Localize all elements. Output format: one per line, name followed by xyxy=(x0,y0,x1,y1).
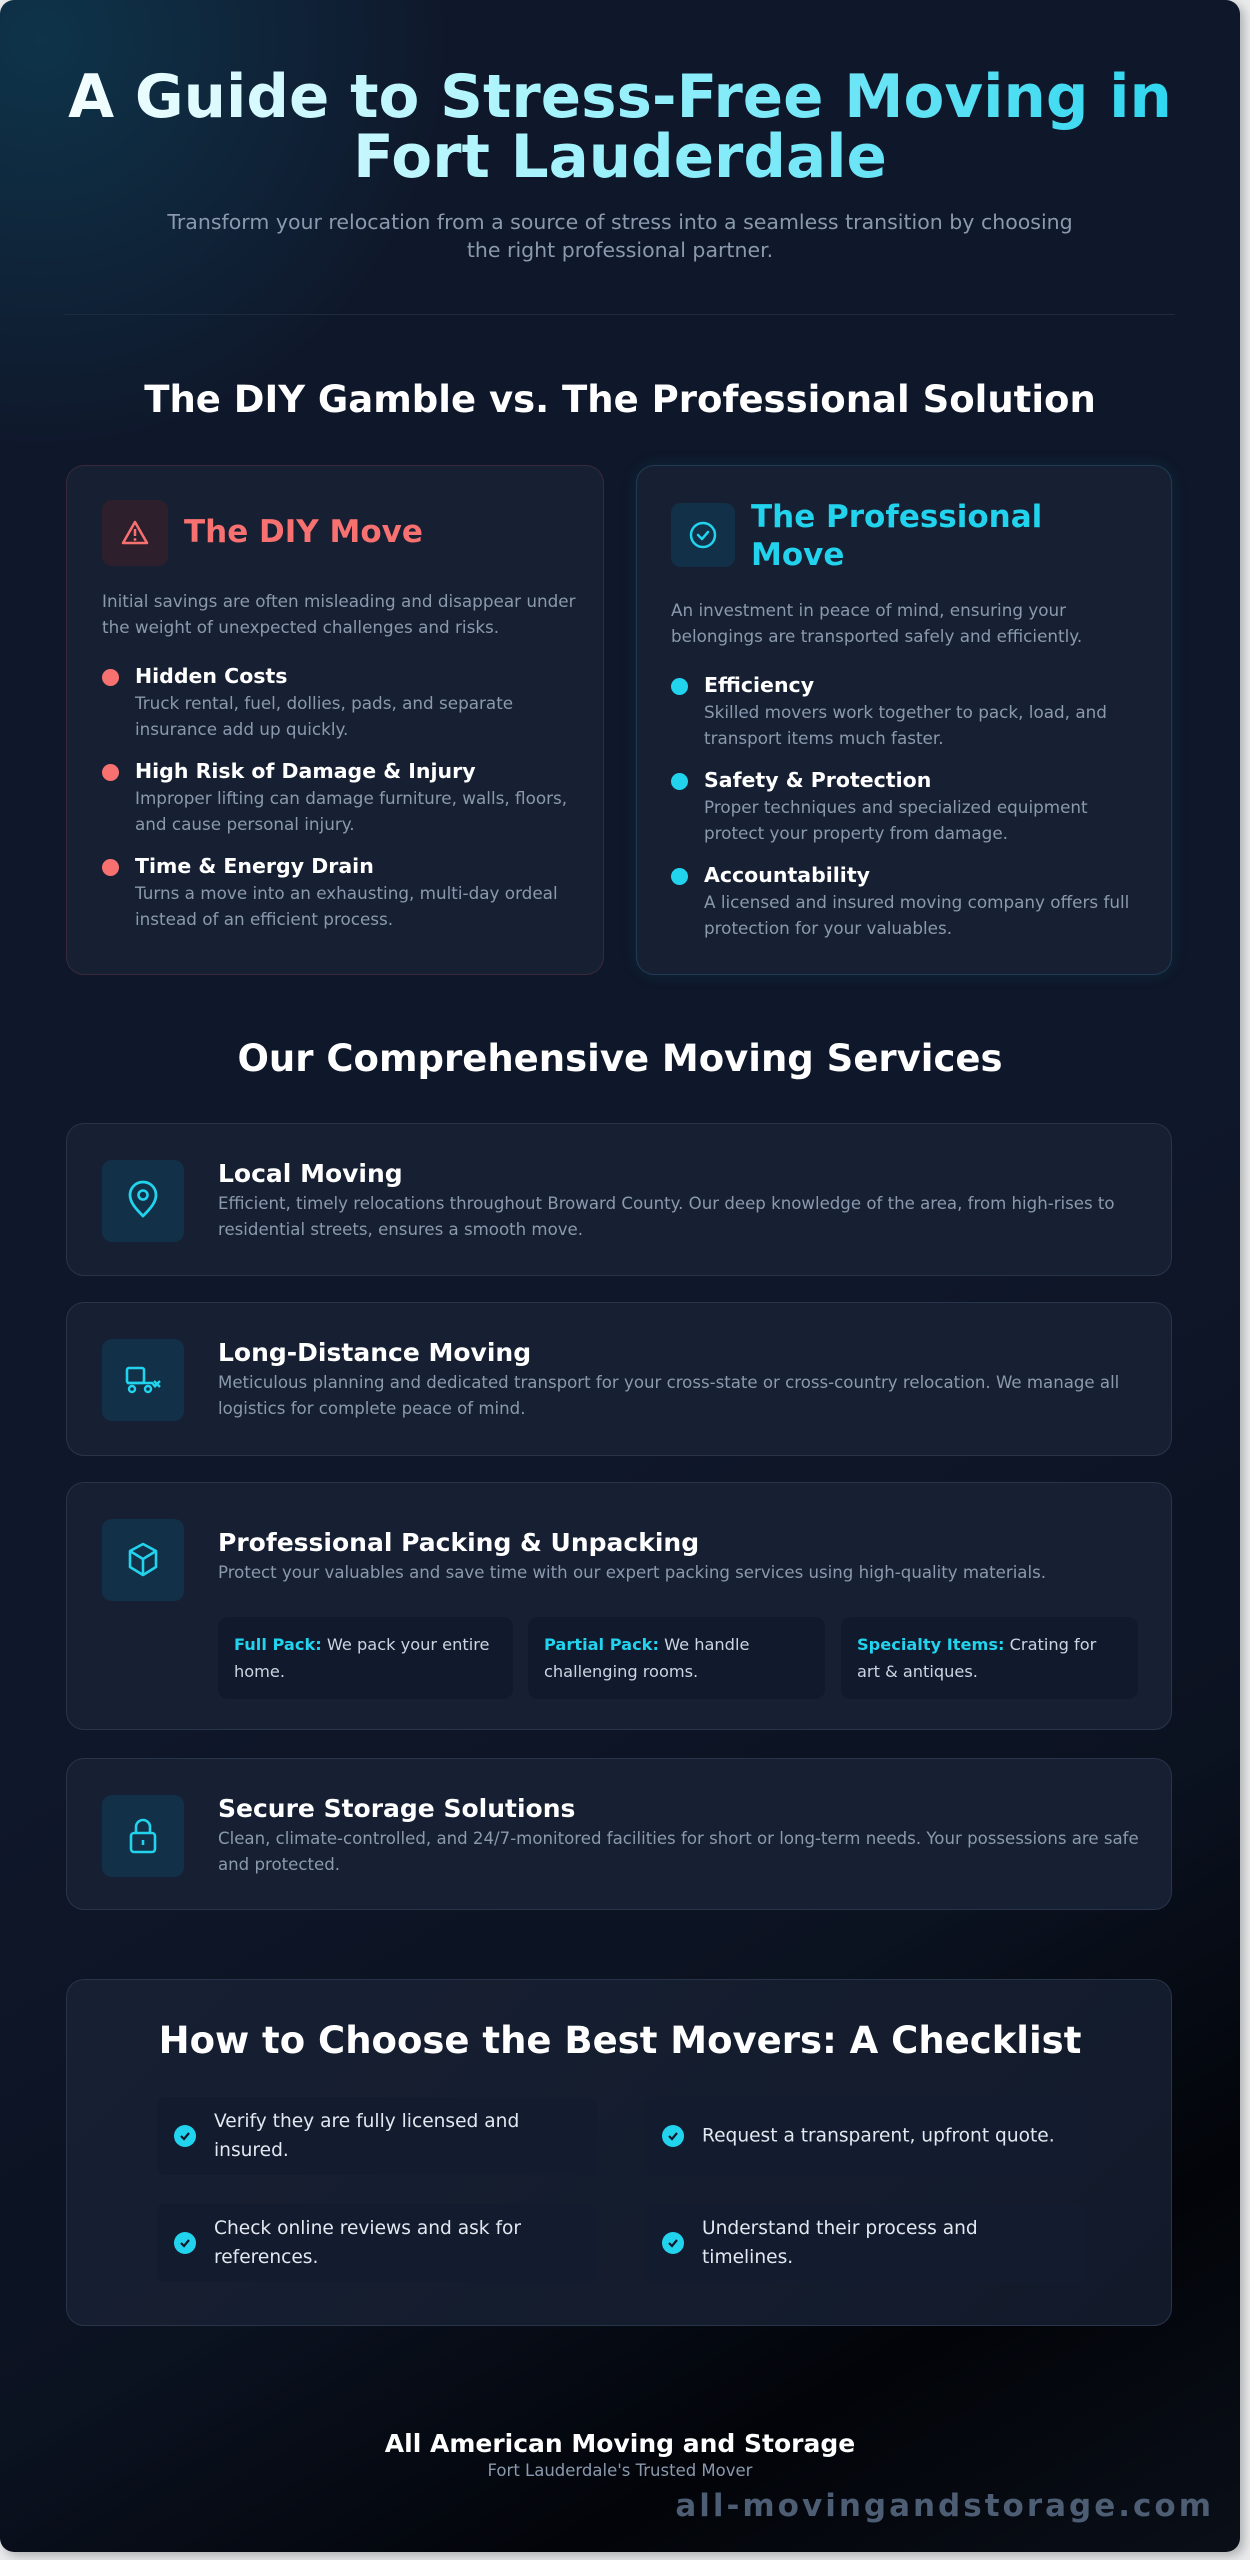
check item 2 xyxy=(645,2097,1085,2175)
item: safety: protect your property from damage. xyxy=(704,823,1008,843)
text: storage xyxy=(218,1794,1139,1874)
text: pro intro xyxy=(671,600,1082,646)
item: time xyxy=(102,854,558,929)
heading: comparison: The DIY Gamble vs. The Professional Solution xyxy=(144,378,1096,421)
subtitle xyxy=(167,210,1073,262)
service: storage xyxy=(66,1758,1172,1910)
item: accountability: Accountability xyxy=(704,863,870,887)
subtitle: the right professional partner. xyxy=(467,238,773,262)
item: efficiency xyxy=(671,673,1107,748)
text: long distance: logistics for complete peace of mind. xyxy=(218,1399,525,1418)
heading: checklist: How to Choose the Best Movers: A Checklist xyxy=(159,2019,1081,2062)
sub-box: full pack: home. xyxy=(234,1662,285,1681)
check item 1: insured. xyxy=(214,2140,289,2161)
text: packing: Protect your valuables and save time with our expert packing services using high-quality materials. xyxy=(218,1563,1046,1582)
sub-box: partial pack xyxy=(528,1617,825,1699)
sub-box: partial pack: Partial Pack: We handle xyxy=(544,1635,749,1654)
service: packing xyxy=(66,1482,1172,1730)
check item 2: Request a transparent, upfront quote. xyxy=(702,2126,1055,2146)
text: long distance xyxy=(218,1338,1119,1418)
text: long distance: Meticulous planning and dedicated transport for your cross-state or cross-country relocation. We manage all xyxy=(218,1373,1119,1392)
text: long distance: Long-Distance Moving xyxy=(218,1338,531,1367)
text: packing: Professional Packing & Unpacking xyxy=(218,1528,699,1557)
text: pro intro: belongings are transported safely and efficiently. xyxy=(671,626,1082,646)
title xyxy=(0,68,1240,188)
item: accountability xyxy=(671,863,1129,938)
footer: company: All American Moving and Storage xyxy=(385,2429,855,2458)
sub-box: specialty: Specialty Items: Crating for xyxy=(857,1635,1096,1654)
text: packing xyxy=(218,1528,1046,1582)
sub-box: full pack xyxy=(218,1617,513,1699)
check item 4: timelines. xyxy=(702,2247,793,2268)
icon: truck xyxy=(102,1339,184,1421)
text: local xyxy=(218,1159,1115,1239)
item: time: Time & Energy Drain xyxy=(135,854,374,878)
item: accountability: A licensed and insured moving company offers full xyxy=(704,892,1129,912)
service: local moving xyxy=(66,1123,1172,1276)
heading: professional move: The Professional xyxy=(751,499,1042,535)
watermark: all-movingandstorage.com xyxy=(675,2488,1214,2524)
icon: check circle xyxy=(671,503,735,567)
text: storage: and protected. xyxy=(218,1855,340,1874)
heading: DIY move: The DIY Move xyxy=(184,514,423,550)
heading: professional move: Move xyxy=(751,537,844,573)
icon: warning xyxy=(102,500,168,566)
item: time: instead of an efficient process. xyxy=(135,909,393,929)
text: local: residential streets, ensures a smooth move. xyxy=(218,1220,583,1239)
check item 3: references. xyxy=(214,2247,318,2268)
check item 3: Check online reviews and ask for xyxy=(214,2218,521,2239)
check item 1 xyxy=(157,2097,597,2175)
item: time: Turns a move into an exhausting, multi-day ordeal xyxy=(135,883,558,903)
item: safety: Proper techniques and specialized equipment xyxy=(704,797,1088,817)
text: local: Local Moving xyxy=(218,1159,403,1188)
title: Fort Lauderdale xyxy=(353,123,887,192)
item: damage: High Risk of Damage & Injury xyxy=(135,759,476,783)
heading: professional move xyxy=(751,499,1042,573)
service: long distance xyxy=(66,1302,1172,1456)
sub-box: specialty xyxy=(841,1617,1138,1699)
item: safety xyxy=(671,768,1088,843)
check item 3 xyxy=(157,2204,597,2282)
sub-box: specialty: art & antiques. xyxy=(857,1662,978,1681)
text: storage: Clean, climate-controlled, and 24/7-monitored facilities for short or long-term needs. Your possessions are safe xyxy=(218,1829,1139,1848)
item: damage: and cause personal injury. xyxy=(135,814,355,834)
item: efficiency: Skilled movers work together to pack, load, and xyxy=(704,702,1107,722)
item: efficiency: transport items much faster. xyxy=(704,728,944,748)
item: hidden costs: Truck rental, fuel, dollies, pads, and separate insurance add up quickly. xyxy=(135,693,513,739)
item: damage xyxy=(102,759,567,834)
subtitle: Transform your relocation from a source of stress into a seamless transition by choosing xyxy=(167,210,1073,234)
panel: checklist xyxy=(66,1979,1172,2326)
item: accountability: protection for your valuables. xyxy=(704,918,952,938)
sub-box: full pack: Full Pack: We pack your entire xyxy=(234,1635,490,1654)
panel: professional move xyxy=(636,465,1172,975)
panel: DIY move xyxy=(66,465,604,975)
footer: tagline: Fort Lauderdale's Trusted Mover xyxy=(488,2461,752,2480)
icon: lock xyxy=(102,1795,184,1877)
item: efficiency: Efficiency xyxy=(704,673,814,697)
check item 1: Verify they are fully licensed and xyxy=(214,2111,519,2132)
item: safety: Safety & Protection xyxy=(704,768,931,792)
icon: box xyxy=(102,1519,184,1601)
sub-box: partial pack: challenging rooms. xyxy=(544,1662,698,1681)
text: DIY intro: Initial savings are often misleading and disappear under the weight of unexpected challenges and risks. xyxy=(102,591,575,637)
check item 4 xyxy=(645,2204,1085,2282)
text: pro intro: An investment in peace of mind, ensuring your xyxy=(671,600,1066,620)
item: damage: Improper lifting can damage furniture, walls, floors, xyxy=(135,788,567,808)
icon: map pin xyxy=(102,1160,184,1242)
item: hidden costs: Hidden Costs xyxy=(135,664,288,688)
text: storage: Secure Storage Solutions xyxy=(218,1794,575,1823)
text: local: Efficient, timely relocations throughout Broward County. Our deep knowledge of the area, from high-rises to xyxy=(218,1194,1115,1213)
item: hidden costs xyxy=(102,664,513,739)
check item 4: Understand their process and xyxy=(702,2218,978,2239)
title: A Guide to Stress-Free Moving in xyxy=(68,63,1172,132)
heading: services: Our Comprehensive Moving Services xyxy=(237,1037,1003,1080)
